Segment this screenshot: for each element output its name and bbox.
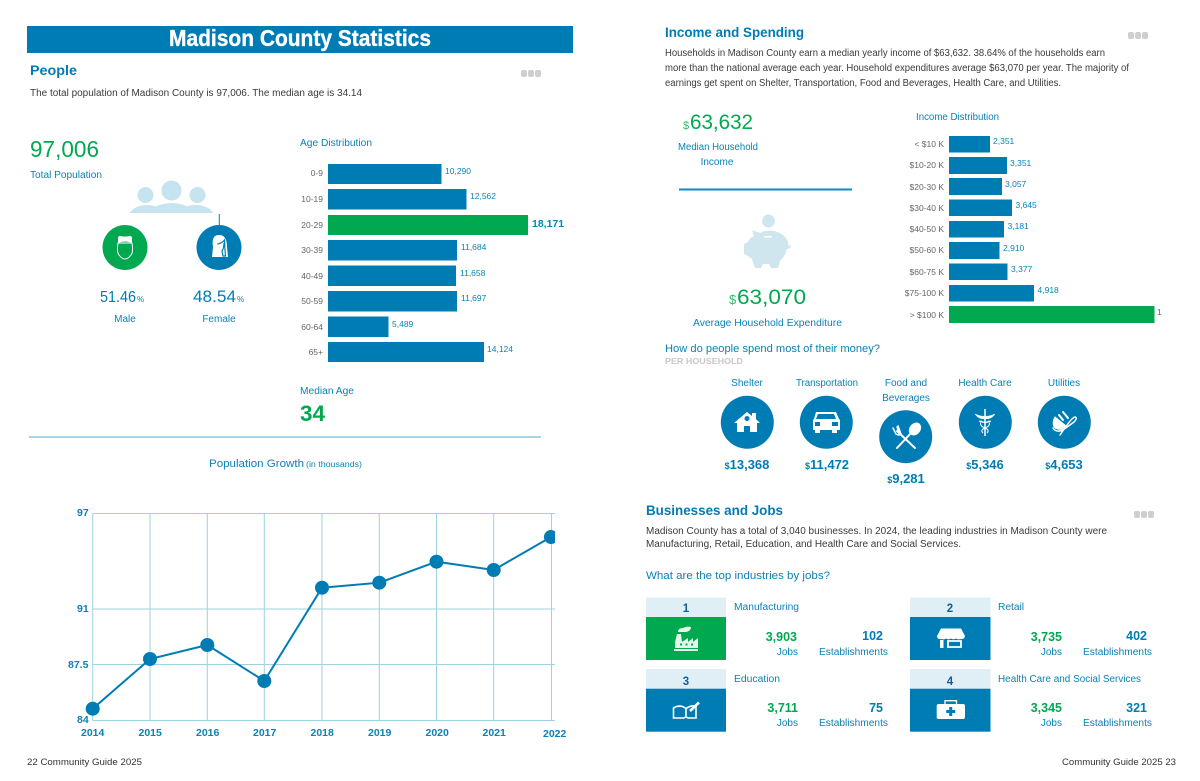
- average expenditure stat: 63,070: [737, 286, 806, 309]
- icon: female: [196, 225, 242, 270]
- chart: income distribution: 3,057: [1005, 179, 1027, 189]
- chart: age distribution: 11,697: [461, 293, 487, 303]
- line chart: 97: [77, 507, 89, 519]
- spending: utilities: $4,653: [1045, 457, 1083, 472]
- industry card: retail: 3,735: [1031, 630, 1062, 644]
- chart: income distribution: 2,910: [1003, 243, 1025, 253]
- male share: Male: [114, 314, 136, 325]
- industry card: manufacturing: 3,903: [766, 630, 797, 644]
- title banner: [27, 25, 573, 53]
- income intro text: Households in Madison County earn a median yearly income of $63,632. 38.64% of the households earn: [665, 48, 1105, 59]
- icon: storefront: [937, 628, 965, 648]
- chart: age distribution: 11,684: [461, 242, 487, 252]
- male share: 51.46: [100, 289, 136, 306]
- average expenditure stat: [693, 286, 842, 329]
- total population stat: [30, 136, 102, 181]
- chart title: (in thousands): [306, 460, 362, 469]
- industry card: education: Jobs: [777, 718, 798, 729]
- page footer left: 22 Community Guide 2025: [27, 757, 142, 768]
- median income stat: [678, 111, 758, 168]
- industry card: retail: Establishments: [1083, 647, 1152, 658]
- industry card: retail: 402: [1126, 629, 1147, 643]
- industry card: health care: 321: [1126, 701, 1147, 715]
- industry card: retail: [910, 598, 1152, 660]
- people intro text: The total population of Madison County is 97,006. The median age is 34.14: [30, 88, 362, 99]
- icon: piggy bank: [744, 214, 791, 268]
- industry card: manufacturing: Establishments: [819, 647, 888, 658]
- industry card: education: [646, 669, 888, 732]
- panel: people: [29, 63, 564, 437]
- chart: age distribution: 10,290: [445, 166, 471, 176]
- spending: transportation: $11,472: [805, 457, 849, 472]
- line chart: 2021: [482, 727, 506, 739]
- chart: income distribution: $40-50 K: [910, 224, 944, 234]
- spending: shelter: [721, 378, 774, 472]
- industry card: education: 3,711: [767, 701, 798, 715]
- icon: house: [734, 412, 760, 432]
- chart: income distribution: Income Distribution: [916, 112, 999, 123]
- chart: income distribution: 3,645: [1016, 200, 1037, 210]
- line chart: 2014: [81, 727, 105, 739]
- icon: car: [813, 412, 840, 433]
- title banner: Madison County Statistics: [169, 25, 431, 51]
- chart: income distribution: [905, 112, 1162, 323]
- businesses intro text: Madison County has a total of 3,040 businesses. In 2024, the leading industries in Madison County were: [646, 526, 1107, 537]
- chart: income distribution: $50-60 K: [910, 245, 944, 255]
- line chart: 2020: [426, 727, 449, 739]
- female share: 48.54: [193, 287, 236, 306]
- line chart: [68, 507, 567, 740]
- spending: food and beverages: Food and: [885, 378, 927, 389]
- spending: shelter: $13,368: [725, 457, 769, 472]
- businesses intro text: Manufacturing, Retail, Education, and Health Care and Social Services.: [646, 539, 961, 550]
- chart: income distribution: 4,918: [1038, 285, 1059, 295]
- chart: income distribution: 2,351: [993, 136, 1015, 146]
- line chart: 2015: [138, 727, 162, 739]
- chart title: [209, 458, 362, 470]
- icon: open book and pen: [674, 702, 699, 718]
- income intro text: earnings get spent on Shelter, Transportation, Food and Beverages, Health Care, and Utilities.: [665, 78, 1061, 89]
- spending: transportation: [796, 378, 858, 472]
- industry card: education: Education: [734, 674, 780, 685]
- icon: fork and spoon: [893, 422, 922, 448]
- chart: age distribution: 30-39: [301, 245, 323, 255]
- industry card: manufacturing: [646, 598, 888, 660]
- female share: %: [237, 295, 244, 304]
- chart: age distribution: Age Distribution: [300, 138, 372, 149]
- industry card: retail: 2: [947, 603, 953, 615]
- heading: income and spending: Income and Spending: [665, 25, 804, 40]
- chart: age distribution: 65+: [309, 347, 323, 357]
- chart: income distribution: $30-40 K: [910, 203, 944, 213]
- total population stat: Total Population: [30, 170, 102, 181]
- icon: caduceus: [975, 409, 995, 436]
- line chart: 2019: [368, 727, 392, 739]
- line chart: 2018: [310, 727, 334, 739]
- chart: age distribution: 0-9: [311, 168, 323, 178]
- income intro text: [665, 48, 1129, 89]
- chart: age distribution: 10-19: [301, 194, 323, 204]
- female share: Female: [202, 314, 236, 325]
- heading: people: People: [30, 63, 78, 78]
- median income stat: Income: [701, 157, 734, 168]
- chart: income distribution: 3,181: [1008, 221, 1029, 231]
- spending: utilities: [1038, 378, 1091, 472]
- chart: age distribution: 40-49: [301, 271, 323, 281]
- chart: income distribution: $75-100 K: [905, 288, 944, 298]
- line chart: 84: [77, 714, 89, 726]
- chart: income distribution: 3,351: [1010, 158, 1032, 168]
- industry card: education: 75: [869, 701, 883, 715]
- industry card: manufacturing: 1: [683, 603, 690, 615]
- spending: transportation: Transportation: [796, 378, 858, 389]
- spending: health care: [958, 378, 1012, 472]
- icon: group of people: [130, 180, 213, 213]
- industry card: manufacturing: Manufacturing: [734, 602, 799, 613]
- median age stat: [300, 386, 354, 426]
- line chart: 2022: [543, 728, 567, 740]
- spending: health care: $5,346: [966, 457, 1004, 472]
- median age stat: Median Age: [300, 386, 354, 397]
- icon: male: [102, 225, 148, 270]
- chart title: Population Growth: [209, 458, 304, 470]
- income intro text: more than the national average each year. Household expenditures average $63,070 per year. The majority of: [665, 63, 1129, 74]
- icon: plug: [1053, 412, 1076, 435]
- chart: income distribution: $10-20 K: [910, 160, 944, 170]
- industry card: health care: 4: [947, 676, 954, 688]
- chart: income distribution: $60-75 K: [910, 267, 944, 277]
- menu dots: income: [1128, 32, 1148, 39]
- line chart: 91: [77, 603, 89, 615]
- chart: age distribution: 14,124: [487, 344, 513, 354]
- median income stat: Median Household: [678, 142, 758, 153]
- chart: age distribution: 11,658: [460, 268, 486, 278]
- chart: age distribution: 20-29: [301, 220, 323, 230]
- median age stat: 34: [300, 401, 326, 426]
- menu dots: people: [521, 70, 541, 77]
- average expenditure stat: Average Household Expenditure: [693, 318, 842, 329]
- connector line: [218, 214, 220, 226]
- spending heading: [665, 343, 880, 366]
- spending: shelter: Shelter: [731, 378, 764, 389]
- industry card: manufacturing: Jobs: [777, 647, 798, 658]
- chart: income distribution: < $10 K: [914, 139, 944, 149]
- spending: food and beverages: Beverages: [882, 393, 930, 404]
- panel: businesses and jobs: [646, 503, 1154, 732]
- median income stat: $: [683, 120, 689, 132]
- industry card: education: Establishments: [819, 718, 888, 729]
- spending: health care: Health Care: [958, 378, 1012, 389]
- industry card: education: 3: [683, 676, 689, 688]
- chart: age distribution: [300, 138, 564, 362]
- chart: age distribution: 50-59: [301, 296, 323, 306]
- menu dots: businesses: [1134, 511, 1154, 518]
- median income stat: 63,632: [690, 111, 753, 134]
- spending: utilities: Utilities: [1048, 378, 1080, 389]
- chart: income distribution: $20-30 K: [910, 182, 944, 192]
- industry card: health care: [910, 669, 1152, 732]
- average expenditure stat: $: [729, 292, 737, 307]
- chart: income distribution: 1: [1157, 307, 1162, 317]
- female share: [193, 287, 244, 325]
- line chart: 2016: [196, 727, 220, 739]
- icon: medical kit: [937, 701, 965, 719]
- industry card: manufacturing: 102: [862, 629, 883, 643]
- chart: income distribution: > $100 K: [910, 310, 944, 320]
- chart: age distribution: 18,171: [532, 218, 564, 230]
- industry card: retail: Retail: [998, 602, 1024, 613]
- industry card: health care: Health Care and Social Services: [998, 674, 1141, 685]
- panel: income and spending: [665, 25, 1162, 486]
- spending heading: How do people spend most of their money?: [665, 343, 880, 355]
- industries subheading: What are the top industries by jobs?: [646, 570, 830, 582]
- line chart: 2017: [253, 727, 277, 739]
- male share: %: [137, 295, 144, 304]
- panel: population growth: [68, 458, 567, 740]
- spending: food and beverages: $9,281: [887, 471, 925, 486]
- industry card: health care: Jobs: [1041, 718, 1062, 729]
- page footer right: Community Guide 2025 23: [1062, 757, 1176, 768]
- industry card: retail: Jobs: [1041, 647, 1062, 658]
- businesses intro text: [646, 526, 1107, 550]
- chart: income distribution: 3,377: [1011, 264, 1033, 274]
- industry card: health care: Establishments: [1083, 718, 1152, 729]
- male share: [100, 289, 144, 325]
- spending: food and beverages: [879, 378, 932, 486]
- chart: age distribution: 12,562: [470, 191, 496, 201]
- icon: factory: [674, 627, 698, 651]
- line chart: 87.5: [68, 659, 89, 671]
- chart: age distribution: 60-64: [301, 322, 323, 332]
- industry card: health care: 3,345: [1031, 701, 1062, 715]
- spending heading: PER HOUSEHOLD: [665, 356, 743, 366]
- chart: age distribution: 5,489: [392, 319, 414, 329]
- total population stat: 97,006: [30, 136, 99, 162]
- heading: businesses and jobs: Businesses and Jobs: [646, 503, 783, 518]
